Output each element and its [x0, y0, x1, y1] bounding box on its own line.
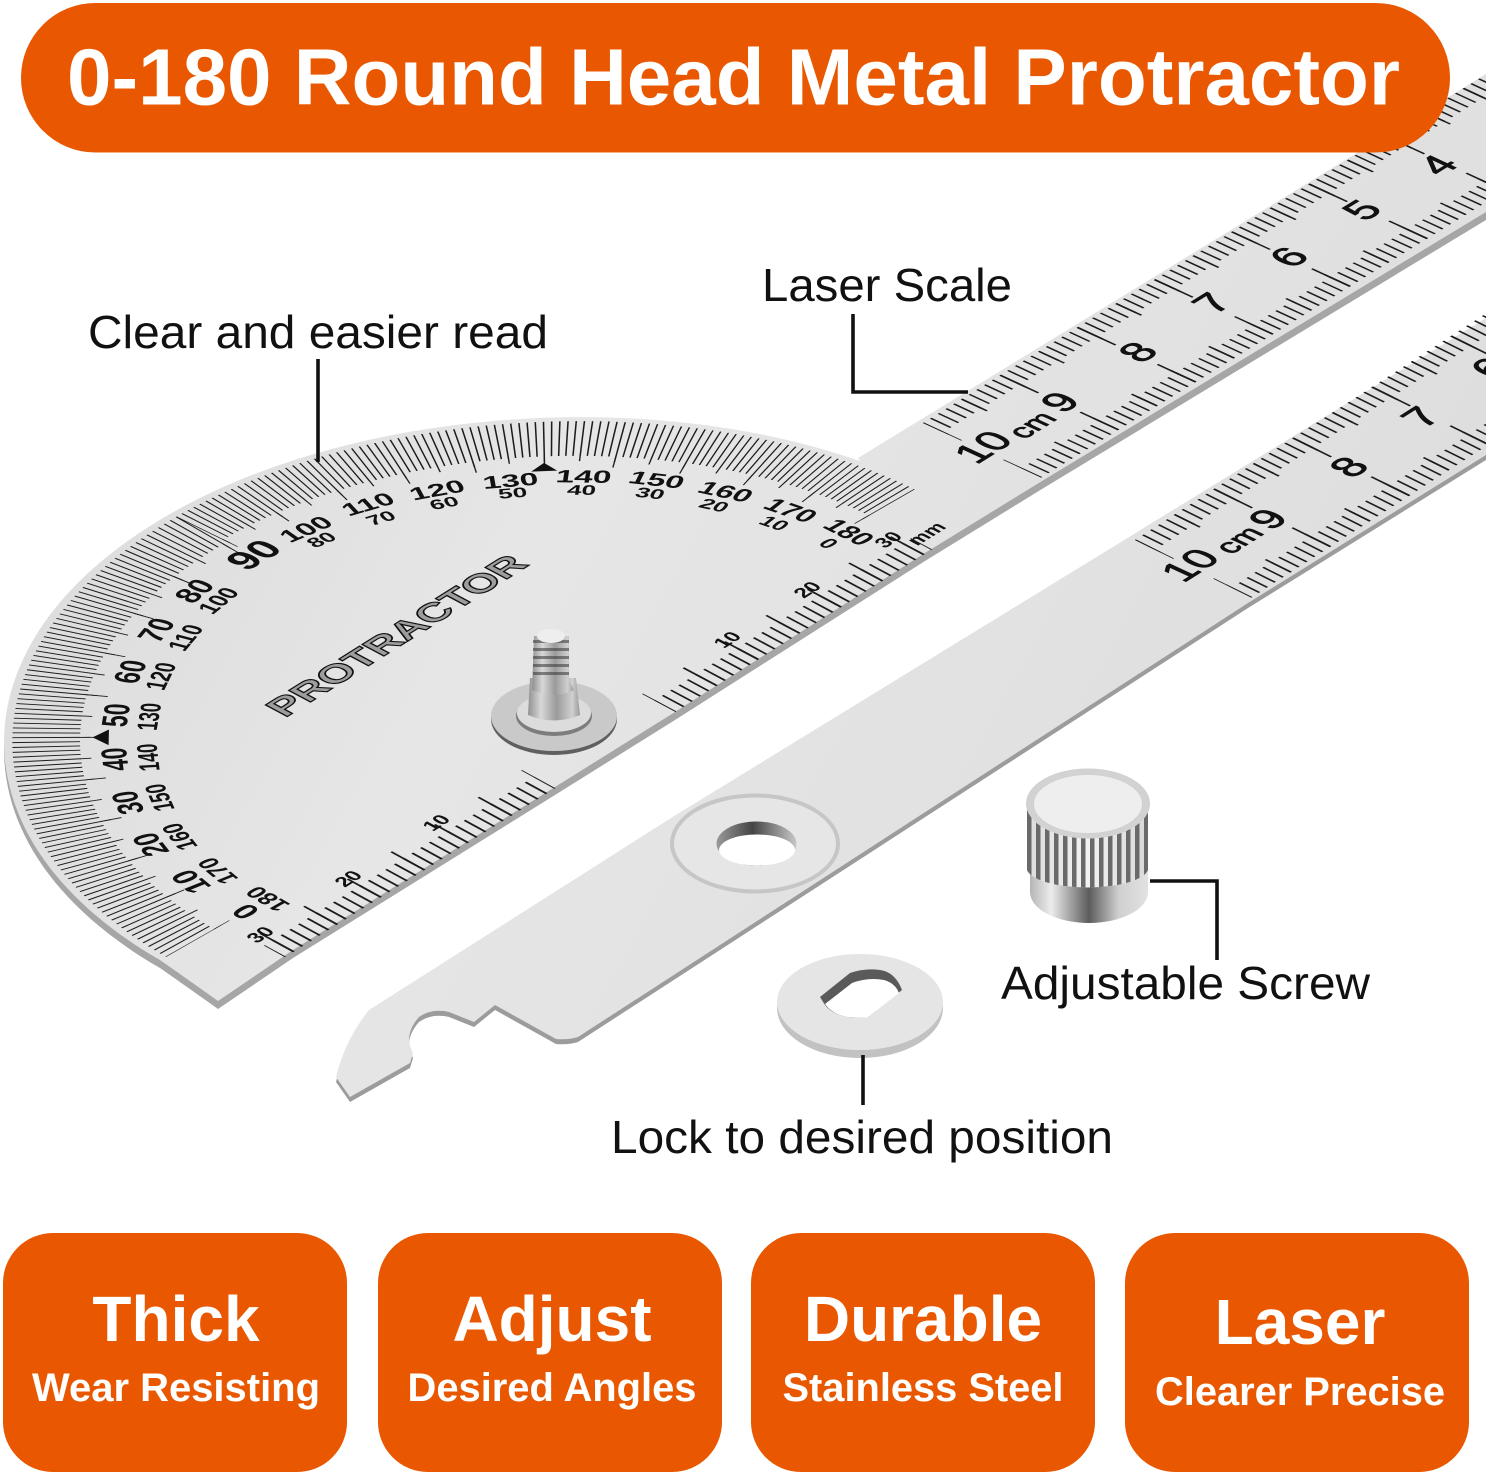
degree numbers, left quadrant: 0: [225, 899, 268, 924]
callout: adjustable screw: [1001, 881, 1371, 1009]
degree numbers, right quadrant: 120: [405, 476, 469, 504]
ruler two numbers: 8: [1319, 451, 1380, 483]
degree numbers, left quadrant: 110: [161, 622, 210, 654]
degree numbers, left quadrant: 10: [163, 865, 220, 898]
degree numbers, left quadrant: 160: [155, 820, 204, 853]
feature card: laser: Clearer Precise: [1155, 1370, 1445, 1414]
title banner: [21, 3, 1450, 152]
degree scale ticks, left quadrant: [12, 516, 238, 957]
degree numbers, right quadrant: 0: [813, 536, 843, 552]
degree numbers, right quadrant: 110: [336, 489, 400, 520]
ruler one numbers: 6: [1258, 241, 1320, 273]
degree numbers, left quadrant: [0, 569, 538, 931]
degree numbers, right quadrant: 180: [816, 515, 882, 550]
ruler two numbers: cm: [1208, 523, 1271, 558]
degree numbers, right quadrant: 50: [497, 485, 529, 502]
millimetre numbers: mm: [902, 519, 952, 549]
degree numbers, left quadrant: 180: [239, 883, 296, 915]
pivot bolt on the protractor: [491, 629, 617, 755]
degree numbers, right quadrant: 70: [362, 508, 401, 529]
degree numbers, right quadrant: 90: [215, 534, 293, 576]
feature card: durable: [751, 1233, 1095, 1472]
feature card: adjust: Adjust: [452, 1283, 652, 1355]
feature card: durable: Stainless Steel: [782, 1366, 1064, 1410]
PROTRACTOR engraved word: PROTRACTOR: [256, 549, 537, 722]
degree numbers, left quadrant: 80: [167, 575, 223, 607]
ruler one scale ticks: [933, 45, 1486, 473]
degree numbers, right quadrant: [215, 368, 882, 722]
feature card: thick: Wear Resisting: [32, 1366, 320, 1410]
knurled adjustable screw cap: [1026, 768, 1150, 923]
feature card: thick: Thick: [92, 1283, 260, 1355]
degree numbers, right quadrant: 140: [554, 466, 613, 487]
degree numbers, right quadrant: 100: [273, 512, 340, 546]
degree scale ticks, right quadrant: [176, 421, 915, 547]
protractor plate with attached ruler: [4, 74, 1486, 1009]
ruler one numbers: 9: [1029, 386, 1091, 418]
degree numbers, left quadrant: 120: [139, 661, 183, 692]
millimetre numbers: 10: [418, 812, 456, 834]
degree numbers, right quadrant: 160: [692, 477, 759, 506]
callout: clear and easier read: Clear and easier read: [88, 306, 548, 358]
degree numbers, right quadrant: 130: [481, 469, 540, 493]
degree numbers, left quadrant: 50: [94, 703, 139, 728]
degree numbers, left quadrant: 140: [131, 743, 166, 772]
ruler one numbers: 5: [1331, 194, 1393, 226]
millimetre numbers: 30: [870, 529, 908, 551]
callout: adjustable screw: Adjustable Screw: [1001, 957, 1371, 1009]
degree numbers, left quadrant: 130: [131, 702, 167, 731]
degree numbers, right quadrant: 150: [625, 467, 688, 493]
feature card: laser: Laser: [1215, 1286, 1385, 1358]
ruler two numbers: 9: [1238, 503, 1299, 535]
second ruler arm with hook: [336, 239, 1486, 1102]
degree numbers, right quadrant: 60: [426, 494, 462, 513]
feature card: adjust: Desired Angles: [408, 1366, 696, 1410]
millimetre numbers: 20: [789, 579, 827, 601]
degree numbers, left quadrant: 100: [192, 584, 245, 617]
degree numbers, left quadrant: 60: [106, 658, 156, 686]
title banner: 0-180 Round Head Metal Protractor: [67, 32, 1400, 122]
degree numbers, right quadrant: 20: [695, 496, 733, 516]
feature card: adjust: [378, 1233, 722, 1472]
degree numbers, right quadrant: 80: [302, 529, 342, 551]
millimetre numbers: [242, 519, 952, 946]
locking washer: [777, 954, 943, 1058]
degree numbers, right quadrant: 10: [754, 513, 794, 534]
degree numbers, left quadrant: 40: [94, 747, 137, 772]
ruler two numbers: [1150, 352, 1486, 587]
millimetre scale, right part of head: [659, 540, 922, 706]
callout: laser scale: [762, 259, 1012, 392]
feature card: thick: [3, 1233, 347, 1472]
ruler one numbers: cm: [1000, 408, 1064, 443]
degree numbers, left quadrant: 170: [191, 854, 244, 887]
ruler two numbers: 10: [1150, 543, 1230, 587]
millimetre numbers: 30: [242, 924, 280, 946]
millimetre numbers: 10: [709, 629, 747, 651]
millimetre numbers: 20: [330, 868, 368, 890]
ruler one numbers: 7: [1181, 287, 1243, 319]
feature card: laser: [1125, 1233, 1469, 1472]
ruler two numbers: 7: [1391, 401, 1452, 433]
degree numbers, left quadrant: 20: [124, 829, 178, 860]
ruler one numbers: 10: [943, 425, 1023, 469]
callout: lock to desired position: Lock to desired position: [611, 1111, 1113, 1163]
degree numbers, right quadrant: 30: [632, 485, 668, 503]
ruler one numbers: 4: [1407, 149, 1469, 181]
degree numbers, left quadrant: 150: [138, 782, 181, 813]
ruler two scale ticks: [1145, 239, 1486, 593]
degree numbers, right quadrant: 170: [757, 494, 824, 527]
millimetre scale, left part of head: [268, 779, 545, 951]
ring and hole in the arm: [672, 796, 838, 892]
degree numbers, right quadrant: 40: [566, 483, 597, 498]
ruler one numbers: [943, 149, 1469, 469]
callout: laser scale: Laser Scale: [762, 259, 1012, 311]
feature card: durable: Durable: [804, 1283, 1042, 1355]
degree numbers, left quadrant: 70: [130, 615, 184, 645]
ruler one numbers: 8: [1107, 336, 1169, 368]
degree numbers, left quadrant: 30: [104, 788, 153, 817]
